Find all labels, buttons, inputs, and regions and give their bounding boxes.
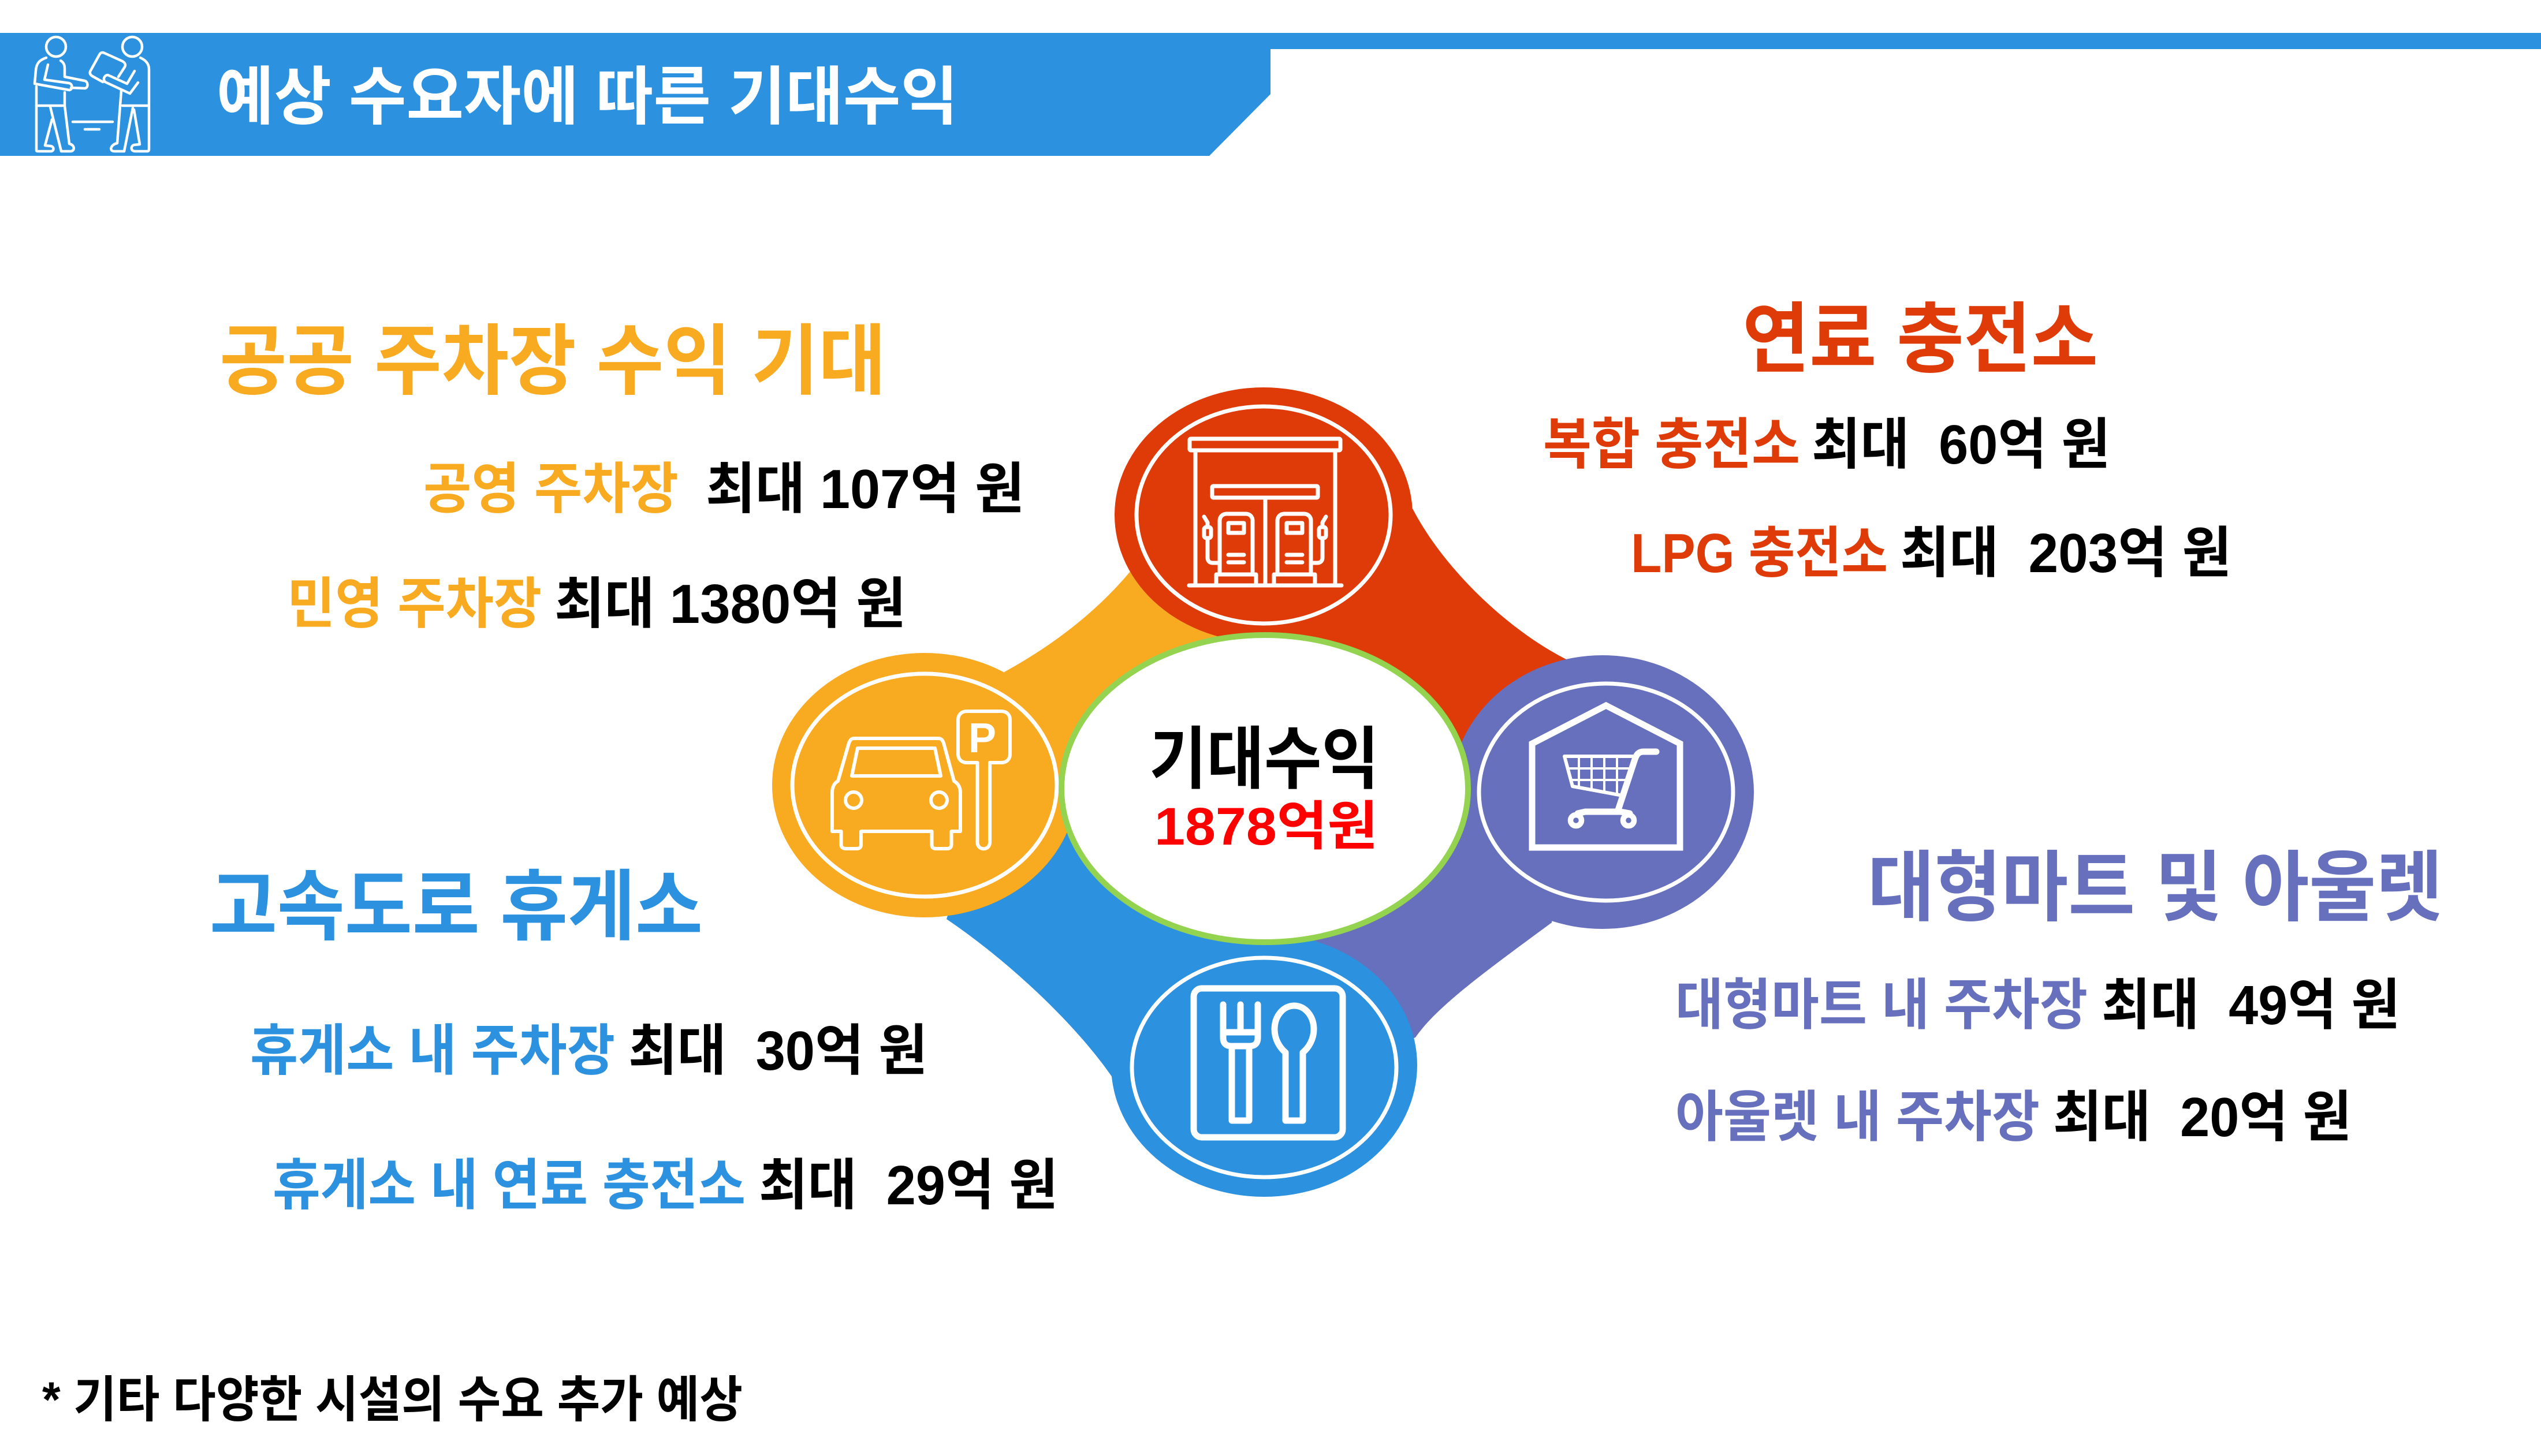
panel: public parking bbox=[219, 319, 1024, 635]
line: outlet parking: 아울렛 내 주차장 bbox=[1675, 1087, 2040, 1148]
line: private lots: 최대 1380억 원 bbox=[554, 573, 906, 635]
heading: 공공 주차장 수익 기대 bbox=[219, 319, 886, 405]
circle: restaurant bbox=[1111, 934, 1417, 1197]
line: private lots: 민영 주차장 bbox=[287, 573, 542, 635]
icon: car and parking sign bbox=[832, 711, 1010, 849]
line: mart parking: 최대 49억 원 bbox=[2102, 975, 2400, 1036]
line: rest area parking: 휴게소 내 주차장 bbox=[250, 1020, 615, 1082]
icon: fuel station bbox=[1189, 439, 1342, 585]
circle: fuel station bbox=[1115, 387, 1413, 643]
line: complex station: 복합 충전소 bbox=[1543, 414, 1800, 476]
centre heading: 기대수익 bbox=[1149, 722, 1379, 798]
footnote: * 기타 다양한 시설의 수요 추가 예상 bbox=[42, 1372, 743, 1428]
icon: two people exchanging a box bbox=[35, 37, 149, 151]
line: mart parking bbox=[1675, 975, 2400, 1036]
line: mart parking: 대형마트 내 주차장 bbox=[1675, 975, 2088, 1036]
line: rest area fuel: 최대 29억 원 bbox=[759, 1155, 1058, 1216]
icon: shopping cart in a building bbox=[1532, 705, 1680, 848]
connector: blue bbox=[947, 789, 1265, 1097]
line: rest area parking: 최대 30억 원 bbox=[628, 1020, 927, 1082]
heading: 연료 충전소 bbox=[1742, 297, 2098, 383]
line: complex station bbox=[1543, 414, 2110, 476]
circle: shopping mart bbox=[1451, 655, 1754, 929]
centre circle bbox=[1061, 635, 1468, 942]
panel: marts and outlets bbox=[1675, 845, 2443, 1148]
circle: parking bbox=[772, 653, 1077, 917]
icon: fork and spoon bbox=[1194, 988, 1343, 1137]
line: rest area fuel: 휴게소 내 연료 충전소 bbox=[273, 1155, 746, 1216]
connector: purple bbox=[1265, 789, 1559, 1097]
line: public lots bbox=[423, 458, 1024, 520]
line: outlet parking: 최대 20억 원 bbox=[2053, 1087, 2352, 1148]
line: LPG station: 최대 203억 원 bbox=[1900, 522, 2231, 584]
icon label: P: P bbox=[968, 715, 996, 761]
connector: orange bbox=[982, 572, 1265, 808]
panel: highway rest areas bbox=[210, 864, 1058, 1216]
diagram: four petals around the centre bbox=[772, 387, 1754, 1197]
line: rest area fuel bbox=[273, 1155, 1058, 1216]
panel: fuel stations bbox=[1543, 297, 2231, 584]
line: public lots: 최대 107억 원 bbox=[706, 458, 1024, 520]
line: outlet parking bbox=[1675, 1087, 2352, 1148]
connector: red bbox=[1265, 509, 1566, 791]
heading: 고속도로 휴게소 bbox=[210, 864, 703, 950]
title: 예상 수요자에 따른 기대수익 bbox=[217, 62, 958, 133]
line: LPG station bbox=[1631, 522, 2231, 584]
line: private lots bbox=[287, 573, 906, 635]
line: rest area parking bbox=[250, 1020, 927, 1082]
line: public lots: 공영 주차장 bbox=[423, 458, 679, 520]
line: LPG station: LPG 충전소 bbox=[1631, 522, 1888, 584]
centre total: 1878억원 bbox=[1154, 797, 1378, 856]
line: complex station: 최대 60억 원 bbox=[1812, 414, 2110, 476]
heading: 대형마트 및 아울렛 bbox=[1868, 845, 2443, 931]
header banner bbox=[0, 33, 2541, 156]
